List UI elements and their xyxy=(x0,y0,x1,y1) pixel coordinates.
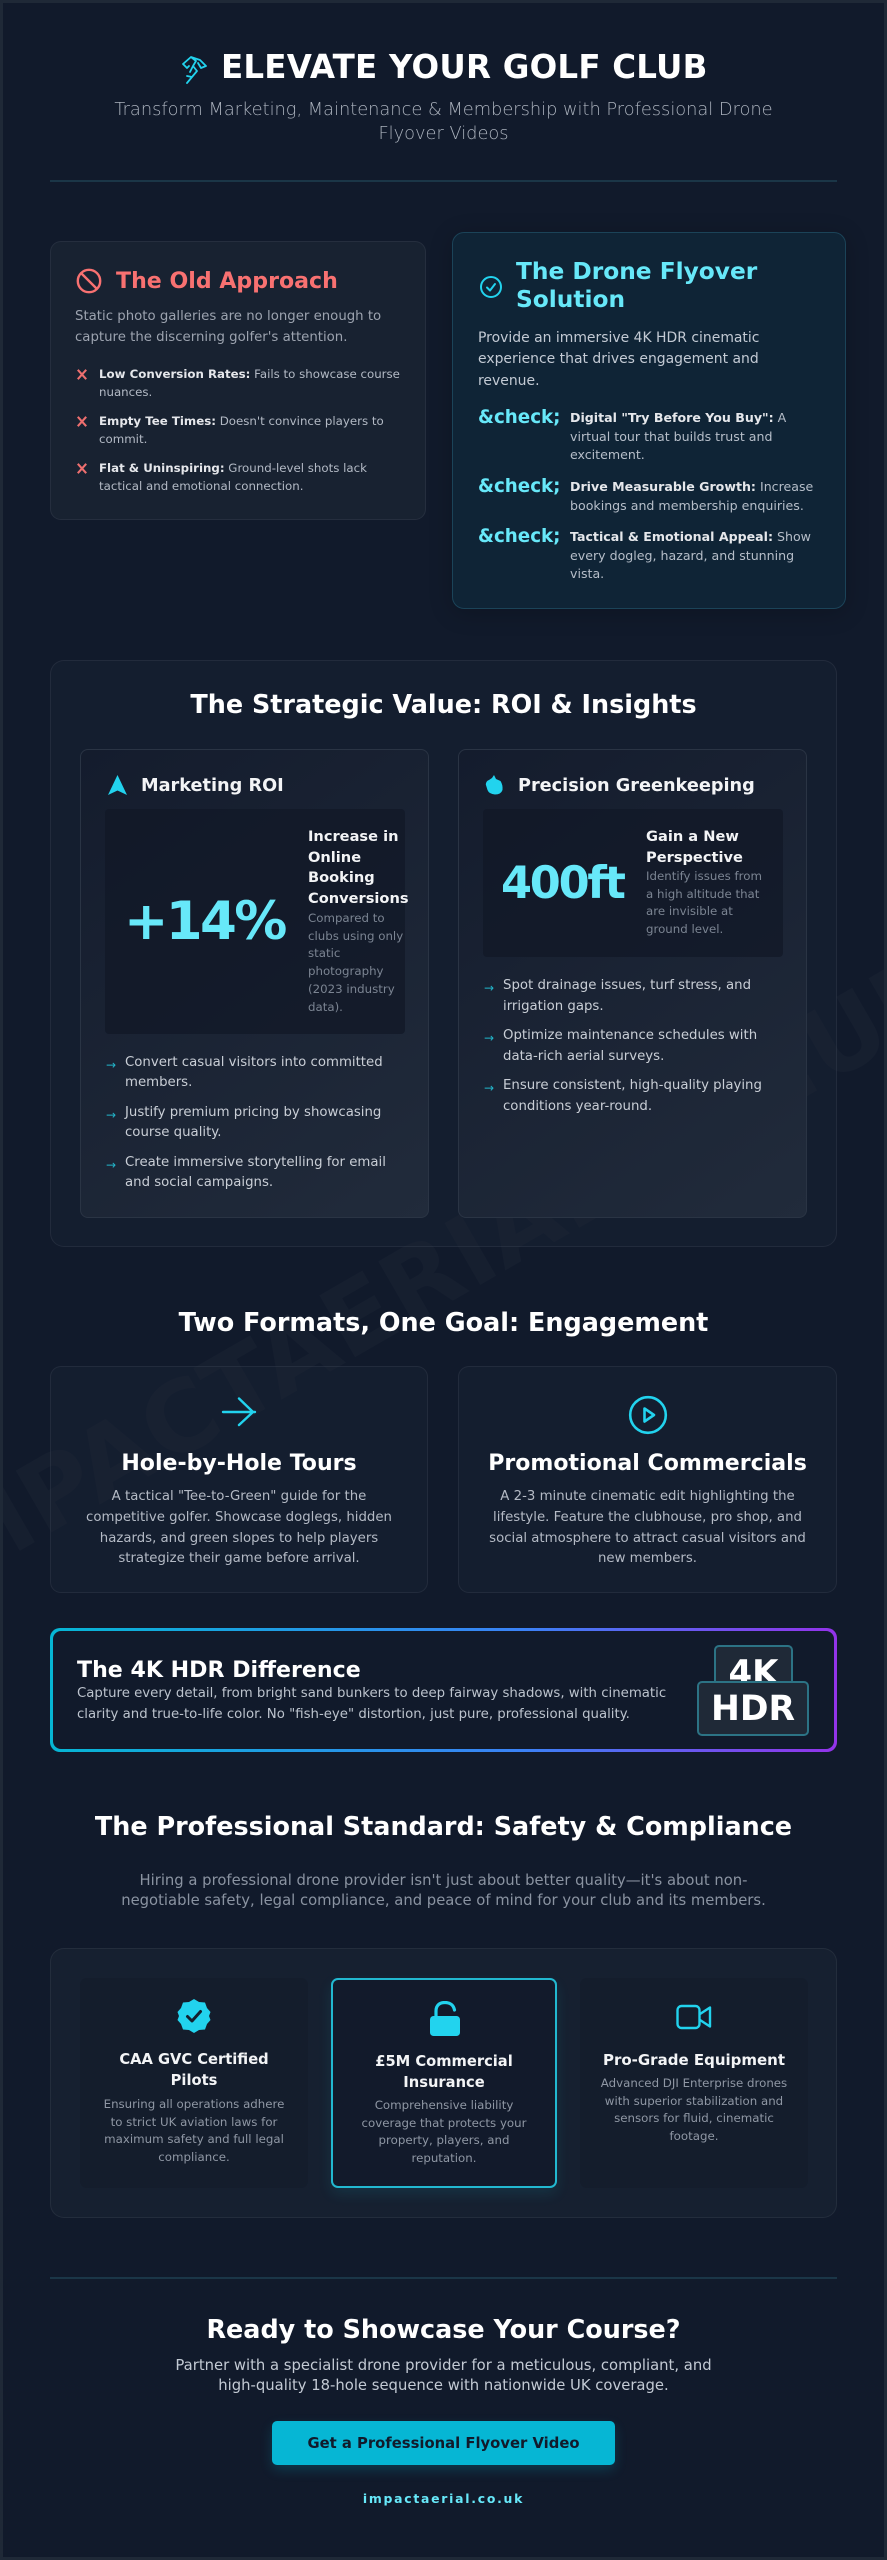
stat box xyxy=(483,809,783,957)
text: strategize their game before arrival. xyxy=(118,1551,360,1566)
bullet: Optimize maintenance schedules with xyxy=(503,1028,757,1043)
heading: two formats: Two Formats, One Goal: Engagement xyxy=(179,1308,708,1338)
stat label: Perspective xyxy=(646,849,743,866)
stat label: Booking xyxy=(308,869,375,886)
callout: 4K HDR difference xyxy=(50,1628,837,1752)
website link: impactaerial.co.uk xyxy=(363,2491,524,2506)
text: with superior stabilization and xyxy=(605,2094,783,2108)
icon: unlocked padlock xyxy=(430,2001,460,2036)
text xyxy=(489,1489,806,1566)
heading: Insurance xyxy=(403,2074,485,2091)
text: hazards, and green slopes to help players xyxy=(100,1531,378,1546)
icon: play circle xyxy=(628,1396,668,1434)
badge: 4K xyxy=(714,1645,793,1705)
stat description: a high altitude that xyxy=(646,887,759,901)
list item: commit. xyxy=(99,432,147,446)
stat label: Increase in xyxy=(308,828,398,845)
stat description xyxy=(308,911,403,1014)
text xyxy=(362,2098,526,2165)
stat description xyxy=(646,869,762,936)
bullet: → xyxy=(106,1058,116,1072)
text: to strict UK aviation laws for xyxy=(111,2115,277,2129)
bullet xyxy=(106,1154,386,1190)
bullet: conditions year-round. xyxy=(503,1099,652,1114)
call to action text: Partner with a specialist drone provider for a meticulous, compliant, and xyxy=(175,2356,712,2374)
stat description: Identify issues from xyxy=(646,869,762,883)
list item: Drive Measurable Growth: Increase xyxy=(570,479,813,494)
list item: Low Conversion Rates: Fails to showcase course xyxy=(99,367,400,381)
bullet xyxy=(106,1104,381,1140)
list item xyxy=(478,476,813,513)
list item: virtual tour that builds trust and xyxy=(570,429,772,444)
intro text: experience that drives engagement and xyxy=(478,351,759,367)
stat description: photography xyxy=(308,964,384,978)
badge: HDR: HDR xyxy=(711,1689,795,1729)
intro text: Hiring a professional drone provider isn't just about better quality—it's about non- xyxy=(140,1872,748,1888)
heading: Solution xyxy=(516,286,625,313)
text: compliance. xyxy=(158,2150,230,2164)
badge: HDR xyxy=(697,1681,809,1736)
text xyxy=(104,2097,284,2164)
intro text xyxy=(75,309,381,344)
bullet: → xyxy=(106,1108,116,1122)
subtitle: Flyover Videos xyxy=(378,123,509,144)
bullet xyxy=(106,1054,383,1090)
heading: Pro-Grade Equipment xyxy=(603,2051,785,2069)
bullet xyxy=(484,978,751,1014)
card: equipment xyxy=(580,1978,808,2188)
panel: the drone flyover solution xyxy=(452,232,846,609)
stat description: ground level. xyxy=(646,922,723,936)
subtitle: Transform Marketing, Maintenance & Membership with Professional Drone xyxy=(114,99,773,120)
heading: Marketing ROI xyxy=(141,776,284,796)
icon: drone xyxy=(182,56,207,84)
bullet: → xyxy=(484,1081,494,1095)
bullet: and social campaigns. xyxy=(125,1175,273,1190)
text xyxy=(580,2075,808,2146)
intro text: revenue. xyxy=(478,372,540,388)
list item: every dogleg, hazard, and stunning xyxy=(570,548,794,563)
text xyxy=(77,1686,666,1722)
bullet: Spot drainage issues, turf stress, and xyxy=(503,978,751,993)
bullet: → xyxy=(484,981,494,995)
card: insurance xyxy=(331,1978,557,2188)
text: footage. xyxy=(670,2129,718,2143)
list item xyxy=(478,407,786,462)
text xyxy=(86,1489,392,1566)
heading: CAA GVC Certified xyxy=(119,2051,269,2068)
intro text: Static photo galleries are no longer enough to xyxy=(75,309,381,324)
card: CAA pilots xyxy=(80,1978,308,2188)
bullet: → xyxy=(484,1031,494,1045)
heading xyxy=(119,2051,269,2089)
text: competitive golfer. Showcase doglegs, hidden xyxy=(86,1510,392,1525)
heading: Hole-by-Hole Tours xyxy=(121,1451,357,1476)
list item xyxy=(77,461,367,493)
stat label: Conversions xyxy=(308,890,409,907)
text: Advanced DJI Enterprise drones xyxy=(601,2076,787,2090)
stat label: Gain a New xyxy=(646,828,739,845)
badge: 4K: 4K xyxy=(728,1653,778,1693)
bullet list xyxy=(106,1054,386,1190)
heading: The Drone Flyover xyxy=(516,258,757,285)
panel: strategic value xyxy=(50,660,837,1247)
stat: +14%: +14% xyxy=(124,891,285,952)
text: A 2-3 minute cinematic edit highlighting the xyxy=(500,1489,795,1504)
bullet: data-rich aerial surveys. xyxy=(503,1049,664,1064)
list item: Tactical & Emotional Appeal: Show xyxy=(570,529,811,544)
list item xyxy=(77,414,384,446)
stat description: static xyxy=(308,946,340,960)
list item: &check; xyxy=(478,476,560,497)
heading: The Old Approach xyxy=(116,268,338,294)
text: property, players, and xyxy=(379,2133,509,2147)
list item: &check; xyxy=(478,526,560,547)
list item: nuances. xyxy=(99,385,152,399)
stat label xyxy=(646,828,743,866)
panel: the old approach xyxy=(50,241,426,520)
call to action text: high-quality 18-hole sequence with nationwide UK coverage. xyxy=(218,2377,669,2394)
bullet xyxy=(484,1028,757,1064)
subtitle xyxy=(114,99,773,144)
bullet list xyxy=(484,978,762,1114)
heading xyxy=(375,2053,513,2091)
button xyxy=(272,2421,615,2465)
intro text: Provide an immersive 4K HDR cinematic xyxy=(478,330,759,346)
list item: Empty Tee Times: Doesn't convince players to xyxy=(99,414,384,428)
heading: £5M Commercial xyxy=(375,2053,513,2070)
bullet: members. xyxy=(125,1075,192,1090)
stat description: clubs using only xyxy=(308,929,403,943)
text: maximum safety and full legal xyxy=(104,2132,284,2146)
list item: tactical and emotional connection. xyxy=(99,479,304,493)
panel: safety and compliance xyxy=(50,1948,837,2218)
icon: no symbol xyxy=(76,268,102,294)
text: sensors for fluid, cinematic xyxy=(614,2111,774,2125)
icon: blob xyxy=(486,775,503,794)
bullet: Create immersive storytelling for email xyxy=(125,1154,386,1170)
bullet: irrigation gaps. xyxy=(503,999,604,1014)
heading: Promotional Commercials xyxy=(488,1451,807,1476)
text: Comprehensive liability xyxy=(375,2098,513,2112)
icon: arrow xyxy=(222,1397,256,1426)
icon: video camera xyxy=(676,2004,712,2030)
heading: Pilots xyxy=(171,2072,217,2089)
list item xyxy=(77,367,400,399)
text: Ensuring all operations adhere xyxy=(104,2097,284,2111)
icon: verified badge xyxy=(178,1999,210,2033)
heading: strategic value: The Strategic Value: ROI & Insights xyxy=(190,690,697,720)
stat box xyxy=(105,809,405,1034)
list item: Flat & Uninspiring: Ground-level shots lack xyxy=(99,461,367,475)
bullet: Ensure consistent, high-quality playing xyxy=(503,1078,762,1093)
button: Get a Professional Flyover Video xyxy=(307,2435,580,2452)
text: new members. xyxy=(598,1551,697,1566)
intro text xyxy=(478,330,759,388)
text: A tactical "Tee-to-Green" guide for the xyxy=(112,1489,366,1504)
text: Capture every detail, from bright sand bunkers to deep fairway shadows, with cinematic xyxy=(77,1686,666,1701)
stat label xyxy=(308,828,409,907)
list item: Digital "Try Before You Buy": A xyxy=(570,410,786,425)
heading xyxy=(516,258,758,313)
stat description: Compared to xyxy=(308,911,385,925)
intro text xyxy=(121,1872,766,1909)
intro text: capture the discerning golfer's attention. xyxy=(75,330,347,344)
text: reputation. xyxy=(411,2151,476,2165)
list item: &check; xyxy=(478,407,560,428)
header xyxy=(114,48,773,144)
bullet: course quality. xyxy=(125,1125,222,1140)
heading: ready to showcase: Ready to Showcase Your Course? xyxy=(206,2315,681,2345)
text: social atmosphere to attract casual visitors and xyxy=(489,1531,806,1546)
bullet: Convert casual visitors into committed xyxy=(125,1054,383,1070)
icon: circle check xyxy=(480,276,502,298)
bullet: → xyxy=(106,1158,116,1172)
stat label: Online xyxy=(308,849,361,866)
intro text: negotiable safety, legal compliance, and peace of mind for your club and its members. xyxy=(121,1892,766,1909)
bullet xyxy=(484,1078,762,1114)
list item: bookings and membership enquiries. xyxy=(570,498,804,513)
bullet: Justify premium pricing by showcasing xyxy=(125,1104,381,1120)
card: promotional commercials xyxy=(458,1366,837,1593)
list item: vista. xyxy=(570,566,604,581)
text: clarity and true-to-life color. No "fish-eye" distortion, just pure, professional quality. xyxy=(77,1707,630,1722)
stat description: data). xyxy=(308,1000,343,1014)
heading: The 4K HDR Difference xyxy=(77,1657,361,1683)
text: coverage that protects your xyxy=(362,2116,526,2130)
icon: navigation arrow xyxy=(108,775,127,795)
card: marketing ROI xyxy=(80,749,429,1218)
heading: Precision Greenkeeping xyxy=(518,776,755,796)
list item xyxy=(478,526,811,581)
stat: 400ft: 400ft xyxy=(501,857,624,909)
card: precision greenkeeping xyxy=(458,749,807,1218)
list item: excitement. xyxy=(570,447,645,462)
heading: professional standard: The Professional Standard: Safety & Compliance xyxy=(95,1812,792,1842)
card: hole-by-hole tours xyxy=(50,1366,428,1593)
stat description: (2023 industry xyxy=(308,982,395,996)
text: lifestyle. Feature the clubhouse, pro shop, and xyxy=(493,1510,802,1525)
title: ELEVATE YOUR GOLF CLUB xyxy=(221,48,708,86)
call to action text xyxy=(50,2356,837,2397)
stat description: are invisible at xyxy=(646,904,733,918)
